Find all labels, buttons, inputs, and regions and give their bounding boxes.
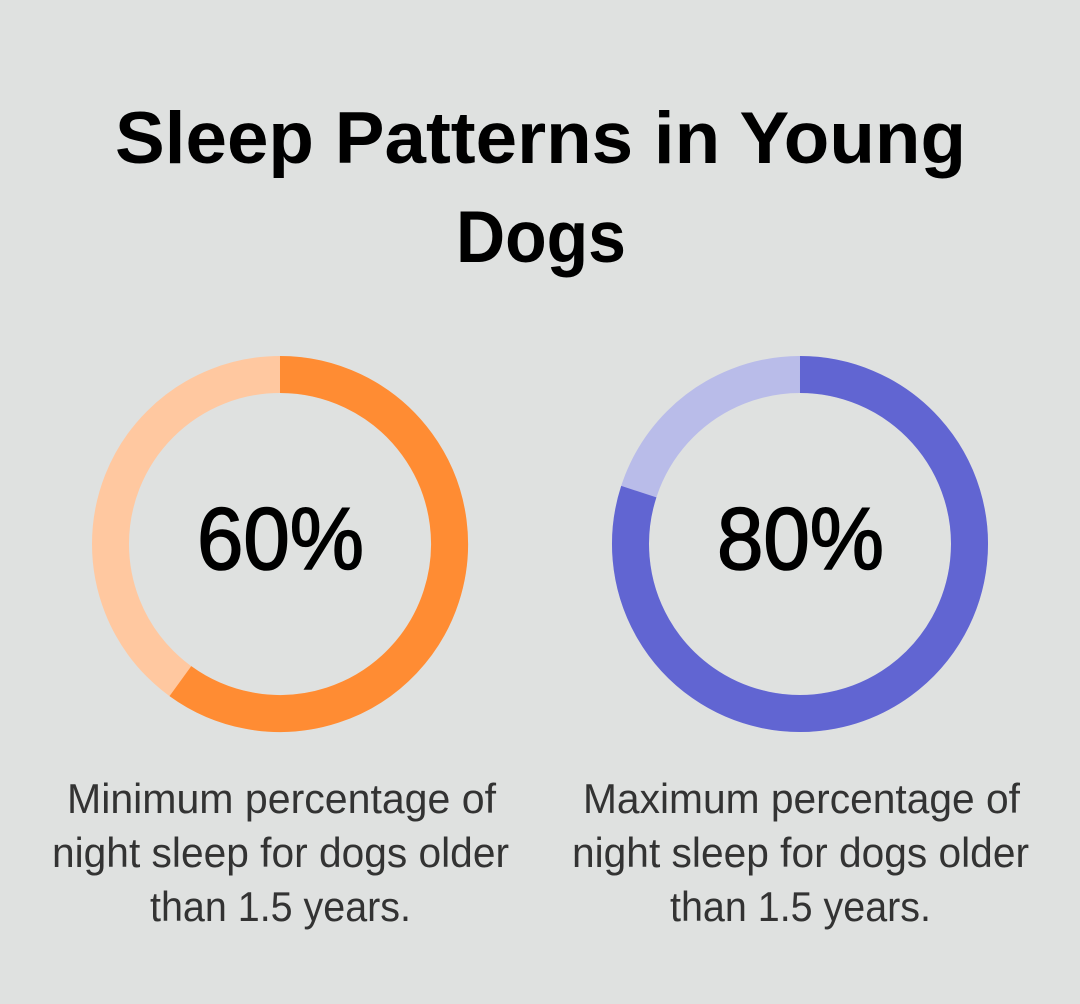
panel: maximum 80% bbox=[572, 374, 1029, 930]
title bbox=[115, 98, 966, 278]
caption: minimum: night sleep for dogs older bbox=[52, 829, 509, 876]
caption: minimum bbox=[52, 775, 509, 930]
panel: minimum 60% bbox=[52, 374, 509, 930]
caption: maximum bbox=[572, 775, 1029, 930]
title: Sleep Patterns in Young bbox=[115, 98, 966, 179]
caption: minimum: than 1.5 years. bbox=[150, 883, 411, 930]
caption: minimum: Minimum percentage of bbox=[67, 775, 496, 822]
title: Dogs bbox=[456, 197, 626, 278]
value: 80%: 80% bbox=[717, 489, 884, 588]
caption: maximum: night sleep for dogs older bbox=[572, 829, 1029, 876]
value: 60%: 60% bbox=[197, 489, 364, 588]
caption: maximum: than 1.5 years. bbox=[670, 883, 931, 930]
donut chart: 80% bbox=[630, 374, 970, 714]
caption: maximum: Maximum percentage of bbox=[583, 775, 1020, 822]
donut chart: 60% bbox=[110, 374, 450, 714]
